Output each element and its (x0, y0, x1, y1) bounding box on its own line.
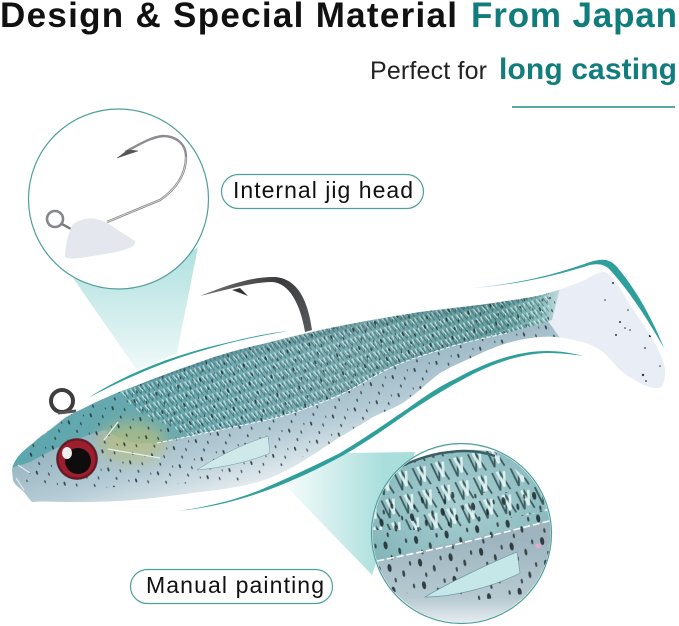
detail upper body (370, 440, 554, 570)
callout beam: manual painting (285, 452, 415, 575)
detail lateral line (377, 521, 549, 561)
fish lure (0, 272, 665, 510)
icon: line tie ring (51, 390, 76, 413)
fish back (5, 288, 560, 470)
callout beam: jig head (73, 247, 198, 370)
detail fin (425, 552, 520, 597)
subtitle: Perfect for long casting: long casting (499, 53, 677, 86)
icon: jig lead head (65, 218, 135, 259)
fish back dark edge (130, 296, 540, 388)
fish specks (20, 288, 560, 490)
label pill: Internal jig head (222, 174, 424, 208)
fish scales (120, 290, 550, 436)
fish nose highlight (16, 465, 30, 490)
inset circle: internal jig head (28, 109, 208, 289)
fish lateral line (157, 333, 507, 443)
detail lower body (370, 520, 552, 626)
fish gill tint (98, 422, 166, 462)
label pill: Internal jig head: Internal jig head (233, 177, 413, 203)
subtitle: Perfect for long casting (370, 53, 677, 86)
label pill: Manual painting (130, 570, 332, 604)
detail back dark edge (402, 450, 496, 468)
detail pink glitter (536, 544, 540, 548)
subtitle: Perfect for long casting: Perfect for (370, 57, 487, 85)
label pill: Manual painting: Manual painting (146, 572, 324, 598)
icon: top hook (200, 277, 312, 332)
fish body base (12, 272, 665, 502)
swoosh: top front (88, 331, 288, 398)
title: Design & Special Material From Japan (0, 0, 677, 35)
swoosh: top tail (472, 260, 664, 348)
detail specks (372, 492, 552, 600)
detail scales (372, 448, 552, 530)
fish pectoral fin (197, 436, 270, 470)
detail top sheen (405, 444, 496, 465)
swoosh: belly (177, 351, 583, 511)
fish texture layers (0, 282, 661, 510)
icon: jig hook wire (47, 136, 186, 229)
fish belly (12, 321, 560, 502)
fish tail specks (549, 282, 661, 382)
fish gill line (104, 422, 160, 458)
inset circle: manual painting detail (370, 440, 554, 626)
heading underline (512, 106, 675, 108)
fish eye (56, 438, 98, 480)
